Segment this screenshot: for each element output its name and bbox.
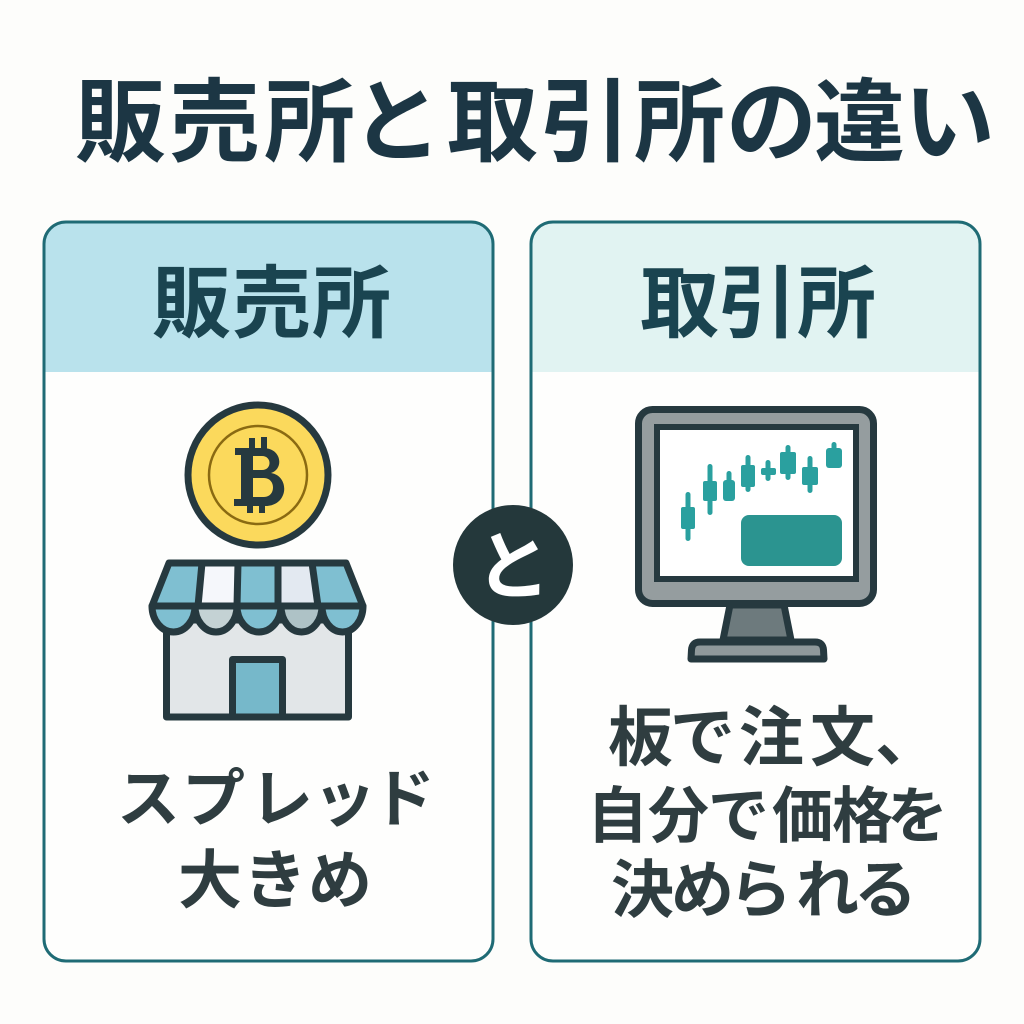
heading: 販売所: 販売所	[152, 259, 391, 348]
caption: スプレッド大きめ: 大きめ	[178, 845, 372, 917]
caption: 板で注文、自分で価格を決められる: 決められる	[611, 856, 917, 926]
icon: monitor with candlestick chart	[638, 410, 874, 659]
icon: bitcoin coin	[188, 405, 328, 545]
caption: 板で注文、自分で価格を決められる	[587, 701, 948, 926]
caption: スプレッド大きめ	[117, 765, 435, 917]
title: 取引所の違い	[447, 73, 995, 174]
teal panel	[741, 515, 842, 566]
badge: と	[453, 505, 573, 625]
panel header: 販売所	[44, 222, 493, 372]
panel: 取引所	[531, 222, 980, 961]
badge: と: と	[475, 525, 551, 609]
heading: 取引所: 取引所	[640, 259, 876, 348]
caption: 板で注文、自分で価格を決められる: 板で注文、	[608, 701, 940, 774]
caption: スプレッド大きめ: スプレッド	[117, 765, 435, 835]
panel header: 取引所	[531, 222, 980, 372]
caption: 板で注文、自分で価格を決められる: 自分で価格を	[587, 782, 948, 850]
title: 販売所と	[75, 73, 442, 174]
panel: 販売所	[44, 222, 493, 961]
candlesticks	[681, 442, 842, 541]
icon: store	[152, 563, 363, 717]
title	[75, 73, 995, 174]
